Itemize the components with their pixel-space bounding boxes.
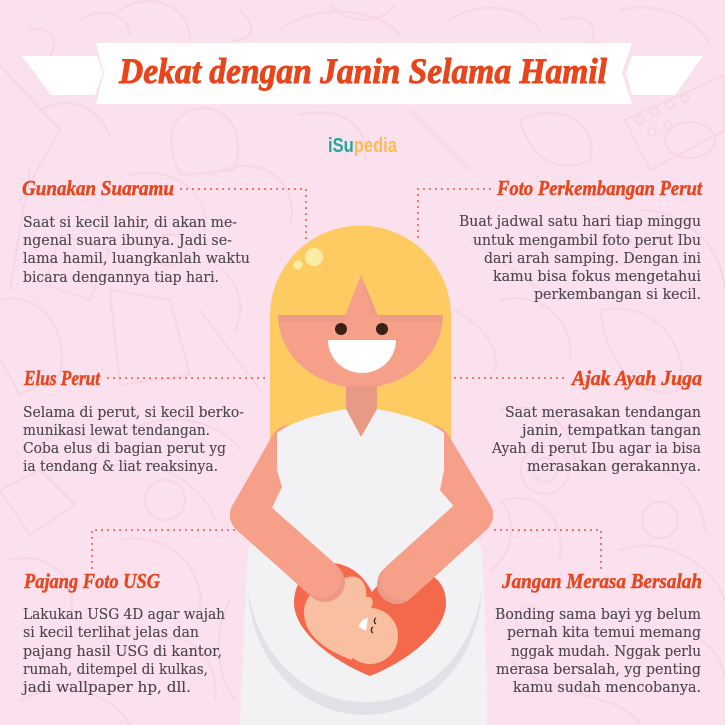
tip: Foto Perkembangan Perut (459, 176, 703, 303)
tip: Gunakan Suaramu: Gunakan Suaramu (22, 176, 174, 200)
tip: Elus Perut: ia tendang & liat reaksinya. (23, 459, 218, 475)
tip: Gunakan Suaramu: Saat si kecil lahir, di akan me- (23, 215, 237, 231)
hair highlights (294, 248, 323, 270)
dotted connectors (92, 189, 601, 568)
eyelids (371, 618, 376, 633)
tip: Ajak Ayah Juga: janin, tempatkan tangan (520, 423, 701, 439)
tip: Elus Perut: Elus Perut (23, 366, 101, 390)
tip: Jangan Merasa Bersalah: merasa bersalah, yg penting (496, 662, 701, 678)
tip: Elus Perut: Coba elus di bagian perut yg (23, 441, 226, 457)
tip: Jangan Merasa Bersalah: pernah kita temui memang (507, 625, 701, 641)
title banner (22, 43, 703, 104)
tip: Gunakan Suaramu: ngenal suara ibunya. Jadi se- (23, 233, 232, 249)
tip: Ajak Ayah Juga: Saat merasakan tendangan (505, 405, 701, 421)
tip: Ajak Ayah Juga: merasakan gerakannya. (527, 459, 701, 475)
tip: Jangan Merasa Bersalah: Jangan Merasa Bersalah (501, 569, 702, 593)
tip: Pajang Foto USG (21, 569, 225, 696)
belly and dress (240, 409, 487, 725)
upper arms (250, 445, 473, 515)
tip: Elus Perut: Selama di perut, si kecil berko- (23, 405, 244, 421)
figure: pregnant mother (240, 226, 487, 725)
tip: Ajak Ayah Juga (491, 366, 702, 475)
smile (328, 340, 396, 373)
heart (294, 563, 446, 676)
tip: Ajak Ayah Juga: Ayah di perut Ibu agar ia bisa (491, 441, 701, 457)
tip: Jangan Merasa Bersalah: nggak mudah. Nggak perlu (511, 644, 701, 660)
tip: Gunakan Suaramu: lama hamil, luangkanlah waktu (23, 251, 250, 267)
face (278, 275, 443, 388)
tip: Pajang Foto USG: jadi wallpaper hp, dll. (21, 680, 191, 696)
tip: Foto Perkembangan Perut: Foto Perkembangan Perut (496, 176, 703, 200)
tip: Pajang Foto USG: Pajang Foto USG (23, 569, 160, 593)
tip: Pajang Foto USG: pajang hasil USG di kantor, (23, 644, 222, 660)
hair (270, 226, 451, 450)
logo: isupedia: iSupedia (328, 135, 398, 157)
tip: Pajang Foto USG: rumah, ditempel di kulkas, (23, 662, 208, 678)
tip: Pajang Foto USG: si kecil terlihat jelas dan (23, 625, 199, 641)
title: Dekat dengan Janin Selama Hamil (118, 51, 607, 91)
neck (346, 386, 377, 437)
tip: Gunakan Suaramu: bicara dengannya tiap hari. (23, 270, 219, 286)
tip: Elus Perut: munikasi lewat tendangan. (23, 423, 210, 439)
tip: Jangan Merasa Bersalah: kamu sudah mencobanya. (513, 680, 701, 696)
eyes (335, 323, 388, 335)
tip: Foto Perkembangan Perut: dari arah samping. Dengan ini (484, 251, 701, 267)
tip: Gunakan Suaramu (22, 176, 250, 286)
tip: Jangan Merasa Bersalah (495, 569, 702, 696)
tip: Pajang Foto USG: Lakukan USG 4D agar wajah (23, 607, 225, 623)
tip: Elus Perut (23, 366, 244, 475)
tip: Ajak Ayah Juga: Ajak Ayah Juga (570, 366, 702, 390)
tip: Foto Perkembangan Perut: Buat jadwal satu hari tiap minggu (459, 214, 701, 230)
fetus (304, 576, 398, 664)
tip: Foto Perkembangan Perut: perkembangan si kecil. (534, 287, 701, 303)
tip: Foto Perkembangan Perut: kamu bisa fokus mengetahui (493, 269, 701, 285)
ear (359, 618, 368, 631)
tip: Foto Perkembangan Perut: untuk mengambil foto perut Ibu (473, 233, 701, 249)
forearms (250, 515, 473, 584)
tip: Jangan Merasa Bersalah: Bonding sama bayi yg belum (495, 607, 701, 623)
